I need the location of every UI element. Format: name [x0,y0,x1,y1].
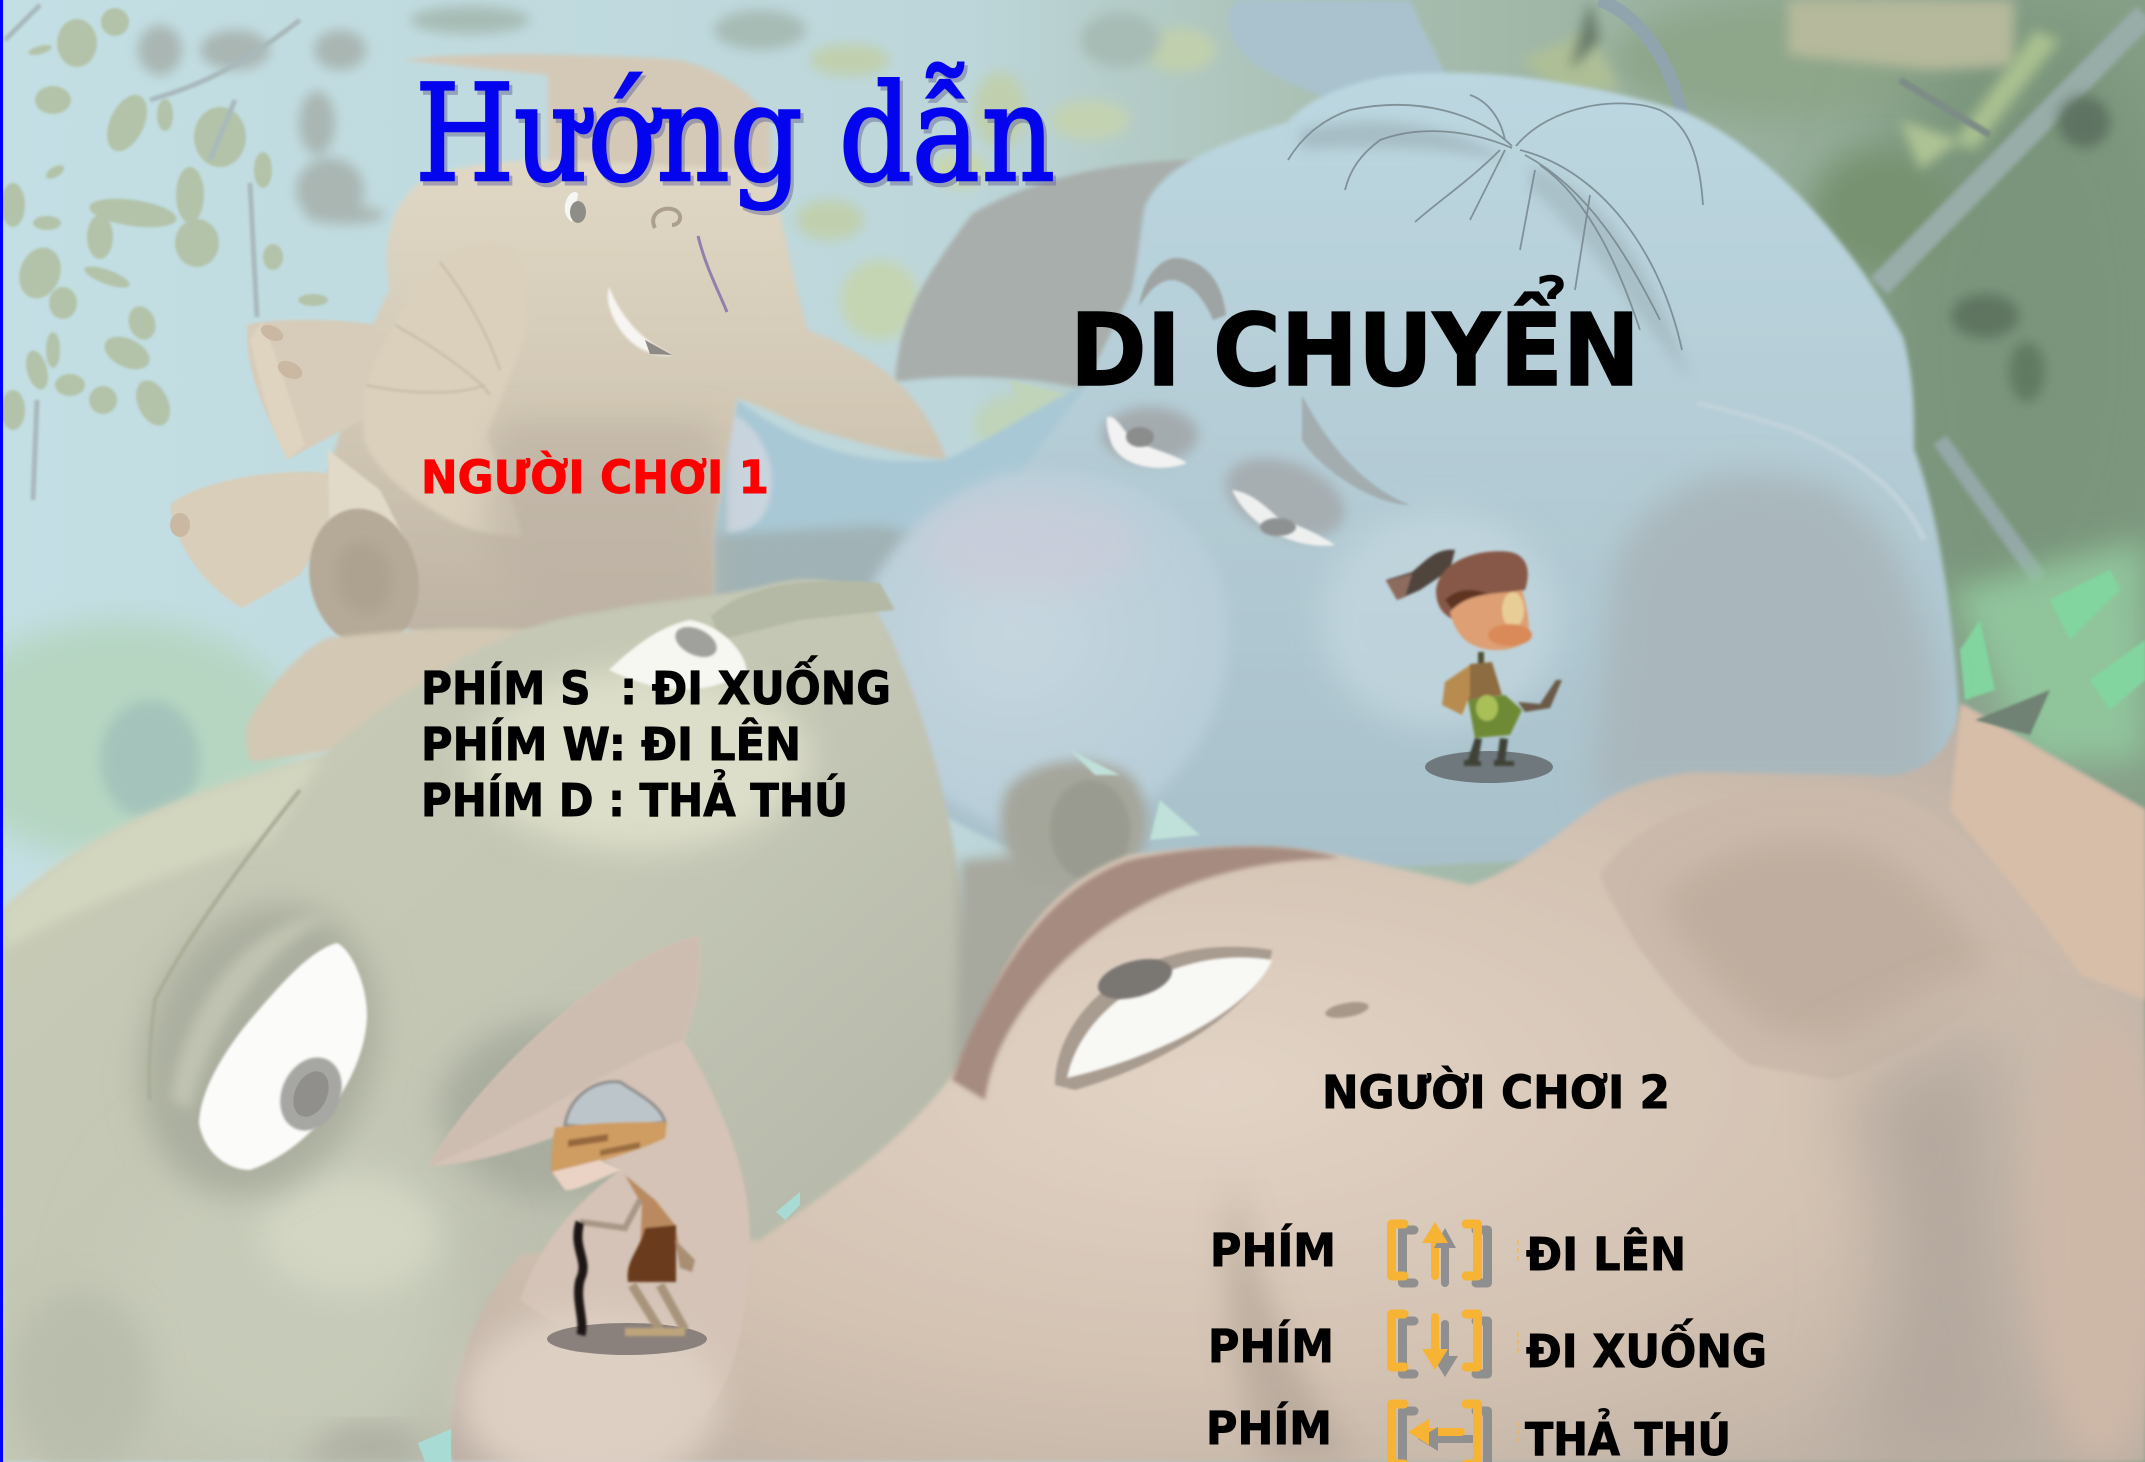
eye sockets [1102,407,1198,463]
title: Hướng dẫn [418,60,1058,216]
trunk back [714,385,1100,640]
tail [1599,0,1682,115]
player 1 controls [421,657,891,827]
iris [269,1047,353,1141]
left ear [429,936,750,1420]
foot C [246,628,600,762]
beige elephant [170,54,946,762]
wooden saddle knob [955,750,1200,1090]
character: old man [547,1082,707,1355]
nose [839,471,1230,830]
salmon back [1950,704,2145,1000]
upper ear [402,54,770,200]
heading: di chuyển: DI CHUYỂN [1070,275,1640,409]
jungle foliage right [1520,0,2145,760]
eye white [199,943,367,1170]
heading: player 1: NGƯỜI CHƠI 1 [421,451,769,504]
foot B [170,472,360,608]
grey ear [895,160,1202,390]
player 1 controls: PHÍM W: ĐI LÊN [421,718,801,771]
key row: down: PHÍM [1208,1320,1334,1373]
key row: up [1210,1222,1686,1283]
eye [1055,947,1272,1090]
blue left edge [0,0,3,1462]
scar [698,236,727,312]
player 1 controls: PHÍM D : THẢ THÚ [421,770,848,827]
top light [470,670,810,850]
jungle foliage top centre [410,6,1216,455]
headband [952,846,1340,1100]
brows [1139,258,1226,320]
foot sole [297,498,431,658]
foot A [247,320,400,459]
key row: up: PHÍM [1210,1224,1336,1277]
green elephant [3,579,993,1462]
eyes [1107,417,1187,468]
player 1 controls: PHÍM S : ĐI XUỐNG [421,657,891,715]
ear edge highlight [3,753,326,950]
right ear [1600,787,2080,1080]
wrinkle [149,790,300,1100]
knee flap [328,450,405,560]
mouth [608,287,672,355]
right side shade [1840,1020,2010,1462]
key row: left: PHÍM [1206,1402,1332,1455]
title: Hướng dẫn [415,56,1055,212]
curl [653,209,680,228]
blue elephant [714,73,1959,880]
eye socket [101,870,419,1230]
key row: down: ĐI XUỐNG [1526,1320,1767,1378]
strap [711,581,895,640]
face shading [440,1020,680,1200]
pink elephant [418,690,2145,1462]
hair shadows [1300,121,1510,160]
teal gaps [418,1429,451,1462]
player 2 key rows [1206,1222,1767,1462]
trunk [364,244,527,537]
head and body [320,160,946,644]
key row: down [1208,1314,1767,1378]
key row: up: ĐI LÊN [1526,1228,1686,1281]
character: boy [1386,550,1562,783]
jungle foliage left [0,5,385,860]
key row: left [1206,1402,1731,1462]
head [840,73,1959,880]
rim eye [609,620,747,689]
heading: player 2: NGƯỜI CHƠI 2 [1322,1066,1670,1119]
eyelashes and hair [1288,95,1703,350]
nose valley [1228,1180,1360,1462]
tusk tip [727,412,772,532]
eye [565,192,578,222]
lower cheek shade [480,420,714,640]
upper elephant leg [1229,0,1450,105]
right ear [1590,474,1936,800]
